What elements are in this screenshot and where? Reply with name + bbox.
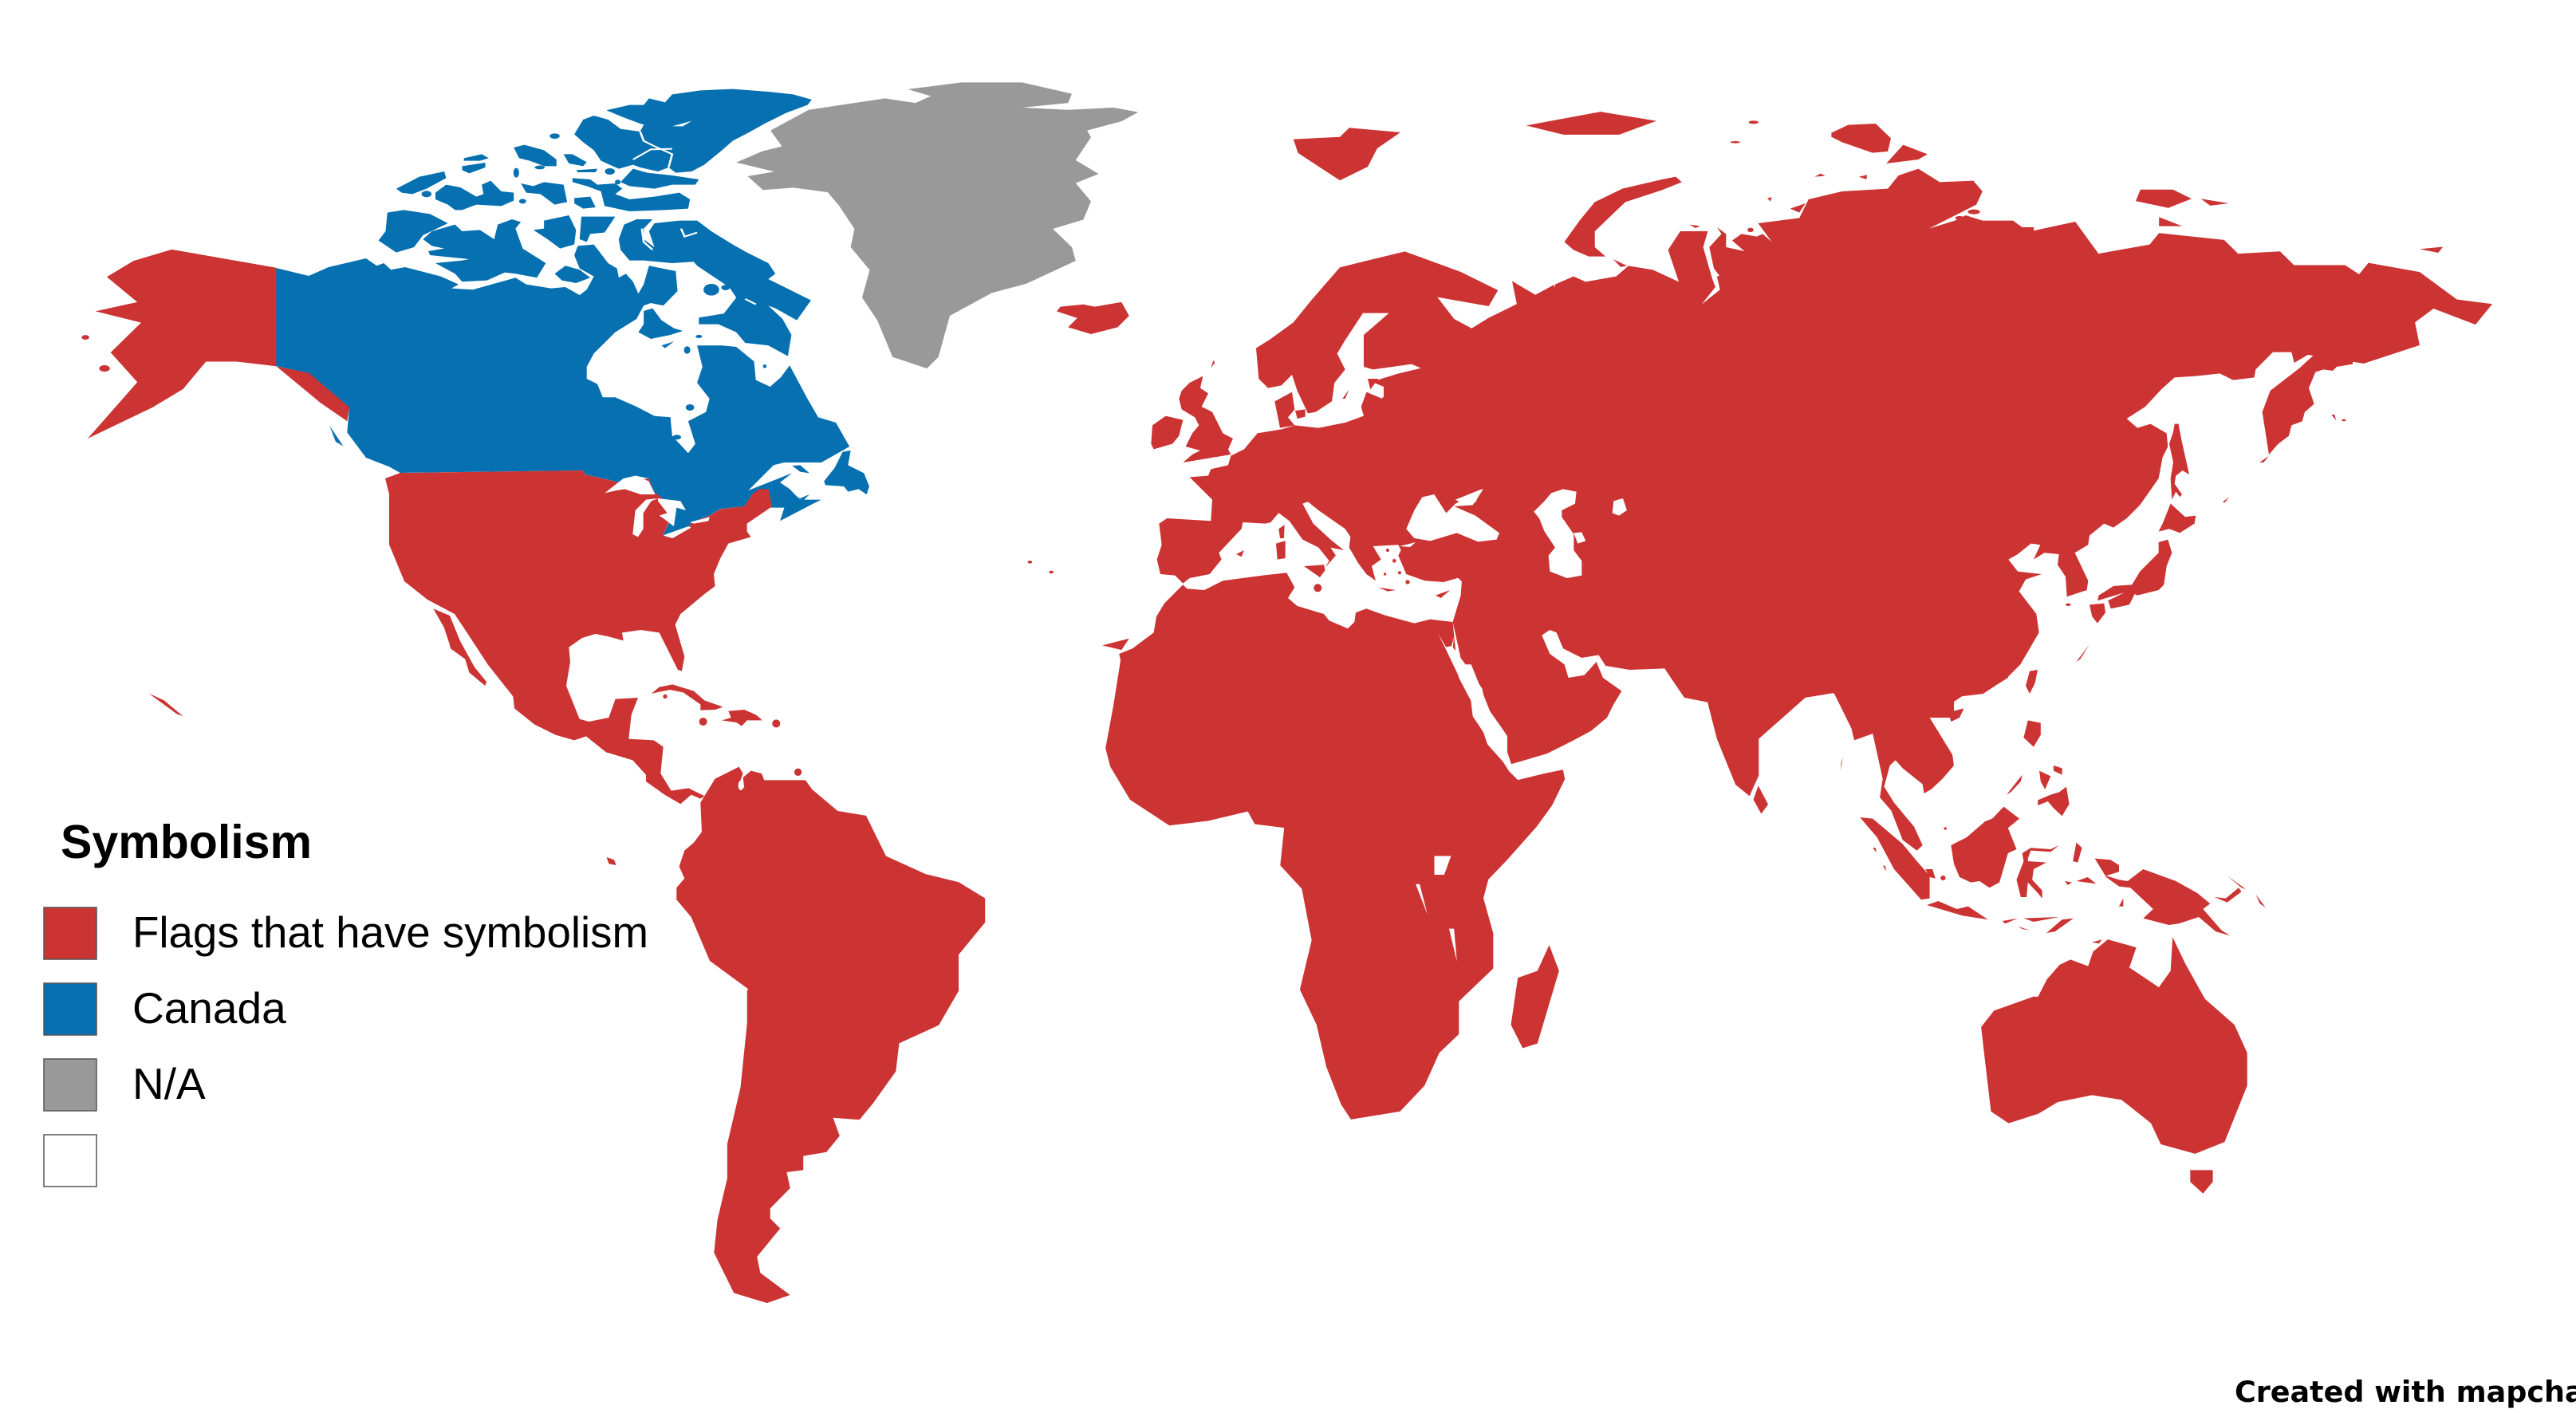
legend label: flags that have symbolism: Flags that have symbolism	[132, 907, 648, 957]
legend	[44, 816, 648, 1187]
map: South America in red	[676, 767, 985, 1303]
map: Africa and Madagascar in red	[1105, 573, 1565, 1120]
legend title: Symbolism	[61, 816, 312, 868]
map: European and Asian islands in red	[1236, 379, 2266, 1194]
legend swatch: Canada	[44, 983, 97, 1035]
map: Canada in blue	[276, 89, 869, 537]
map: African lakes	[1416, 856, 1457, 962]
map: inland seas	[739, 313, 1627, 790]
legend label: Canada: Canada	[132, 983, 286, 1033]
map: Greenland in grey	[736, 82, 1138, 368]
legend swatch: flags that have symbolism	[44, 907, 97, 959]
map: North and Central America in red	[81, 250, 1129, 865]
legend label: N/A: N/A	[132, 1059, 206, 1108]
map: Great Lakes	[605, 476, 710, 538]
map: Eurasia in red	[1151, 112, 2492, 851]
legend swatch: empty	[44, 1135, 97, 1187]
map: channels in the Canadian Arctic	[633, 132, 756, 305]
legend swatch: N/A	[44, 1059, 97, 1111]
